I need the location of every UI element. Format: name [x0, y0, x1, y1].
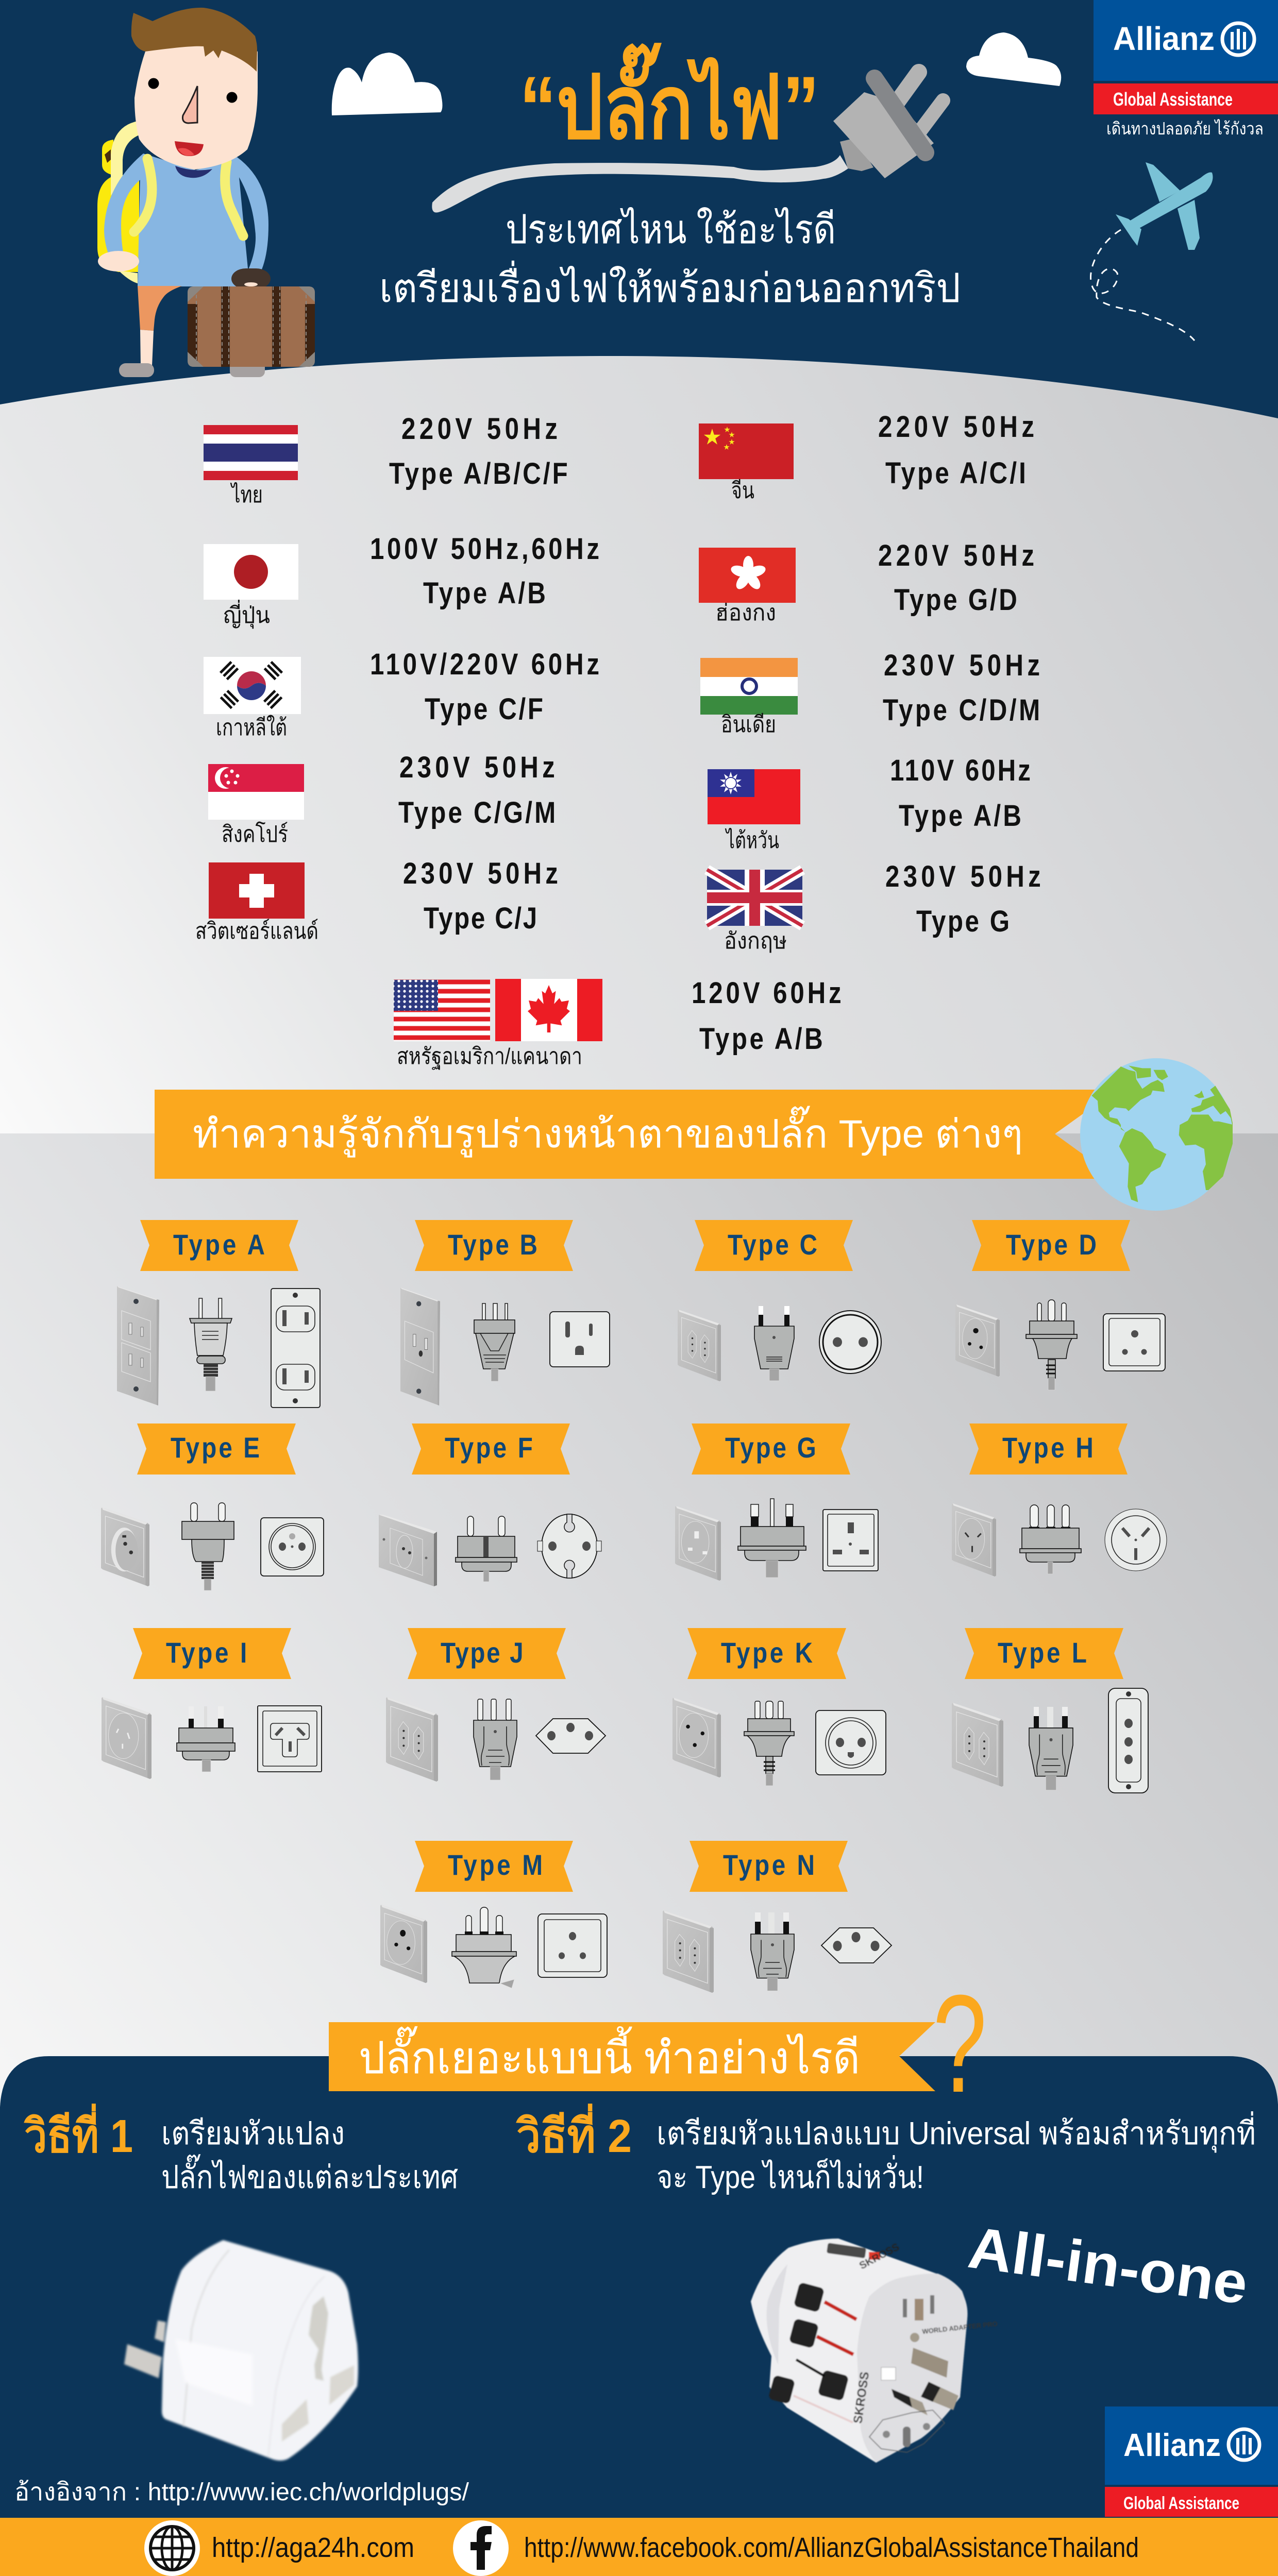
socket [536, 1719, 606, 1753]
row: South Korea: เกาหลีใต้ [216, 715, 287, 740]
icon: plug with cord [432, 72, 943, 213]
plug [1020, 1505, 1081, 1574]
illustration: traveller with backpack and suitcase [97, 8, 315, 377]
icon: facebook [453, 2520, 509, 2576]
row: Japan: Type A/B [423, 577, 546, 610]
banner Type N: Type N [723, 1849, 815, 1882]
row: USA and Canada [394, 976, 842, 1070]
wall socket [101, 1507, 149, 1586]
banner Type L: Type L [998, 1637, 1087, 1669]
header background [0, 0, 1278, 1133]
row: United Kingdom: 230V 50Hz [885, 860, 1041, 893]
flag: India [700, 658, 798, 715]
flag: China [699, 423, 794, 479]
panel: Type C [678, 1220, 881, 1381]
row: China: จีน [731, 478, 754, 503]
flag: USA [394, 980, 490, 1041]
text method 1: ปลั๊กไฟของแต่ละประเทศ [161, 2154, 458, 2195]
banner Type B [415, 1220, 573, 1271]
panel: Type L [952, 1628, 1148, 1793]
wall socket [955, 1304, 1000, 1377]
plug [744, 1701, 794, 1786]
socket [538, 1914, 607, 1977]
banner: how to handle so many plugs: ปลั๊กเยอะแบบนี้ ทำอย่างไรดี [359, 2026, 860, 2083]
row: India: 230V 50Hz [884, 649, 1040, 682]
row: Thailand [204, 412, 568, 507]
shoes [119, 361, 265, 377]
plug [190, 1298, 232, 1391]
row: Thailand: Type A/B/C/F [389, 457, 568, 490]
panel: Type J [386, 1628, 606, 1782]
wall socket [379, 1515, 437, 1586]
row: China [699, 410, 1034, 503]
method 1 [24, 2104, 458, 2195]
subtitle line 2: เตรียมเรื่องไฟให้พร้อมก่อนออกทริป [379, 261, 961, 311]
facebook link: http://www.facebook.com/AllianzGlobalAssistanceThailand [524, 2532, 1139, 2563]
collar [175, 166, 212, 178]
row: Japan [204, 532, 599, 629]
banner Type H: Type H [1002, 1432, 1094, 1464]
socket [819, 1311, 881, 1374]
suitcase [188, 268, 315, 367]
socket [537, 1514, 601, 1578]
panel: Type I [102, 1628, 322, 1779]
flag: Hong Kong [699, 548, 796, 603]
banner Type I: Type I [166, 1637, 247, 1669]
panel: plug types background [0, 1133, 1278, 2112]
row: Singapore: 230V 50Hz [399, 751, 555, 784]
row: Thailand: ไทย [230, 482, 263, 507]
backpack [97, 121, 139, 283]
row: Japan: 100V 50Hz,60Hz [370, 532, 599, 566]
panel: bottom tips [0, 2056, 1278, 2518]
wall socket [675, 1506, 721, 1581]
shorts [138, 286, 182, 331]
panel: Type D [955, 1220, 1165, 1390]
head [134, 31, 258, 170]
row: Switzerland [195, 857, 558, 944]
title: “ปลั๊กไฟ” [519, 43, 819, 157]
Allianz logo top: Global Assistance [1113, 89, 1233, 110]
banner Type D [972, 1220, 1130, 1271]
flag: Canada [495, 979, 602, 1041]
row: Hong Kong: 220V 50Hz [878, 539, 1034, 572]
icon: globe web [144, 2520, 200, 2576]
wall socket [952, 1703, 1003, 1787]
wall socket [952, 1503, 996, 1577]
icon: cloud left [332, 53, 442, 115]
row: South Korea [204, 648, 599, 740]
wall socket [380, 1905, 427, 1983]
banner Type A [140, 1220, 298, 1271]
panel: Type H [952, 1423, 1167, 1577]
panel: Type K [672, 1628, 886, 1786]
banner Type K [687, 1628, 846, 1679]
row: Singapore: Type C/G/M [398, 796, 556, 829]
socket [821, 1928, 892, 1963]
row: United Kingdom: Type G [916, 905, 1010, 938]
photo: universal all-in-one adapter: WORLD ADAPTER PRO [922, 2320, 998, 2335]
text method 2: จะ Type ไหนก็ไม่หวั่น! [657, 2155, 924, 2195]
banner Type F: Type F [445, 1432, 533, 1464]
banner Type D: Type D [1006, 1229, 1097, 1261]
banner Type B: Type B [448, 1229, 537, 1261]
wall socket [386, 1697, 438, 1782]
plug [1026, 1300, 1077, 1390]
row: Taiwan: Type A/B [899, 799, 1021, 833]
Allianz logo bottom: Global Assistance [1123, 2494, 1239, 2513]
row: United Kingdom: อังกฤษ [724, 928, 787, 954]
row: Switzerland: 230V 50Hz [403, 857, 558, 890]
footer bar [0, 2518, 1278, 2576]
row: Hong Kong: Type G/D [894, 583, 1017, 617]
section banner: plug types [155, 1090, 1117, 1179]
panel: Type N [663, 1841, 892, 1993]
row: Switzerland: สวิตเซอร์แลนด์ [195, 919, 318, 944]
subtitle [379, 207, 961, 311]
nose [182, 86, 197, 123]
panel: Type G [675, 1423, 878, 1581]
icon: cloud right [966, 32, 1061, 86]
hair [131, 8, 257, 72]
socket [1108, 1688, 1148, 1793]
row: India: อินเดีย [721, 712, 776, 737]
row: South Korea: Type C/F [425, 692, 543, 726]
wall socket [663, 1910, 714, 1993]
socket [1105, 1509, 1167, 1571]
Allianz logo top: Allianz [1113, 20, 1215, 57]
method 2 [516, 2104, 1256, 2195]
flag: South Korea [204, 657, 301, 714]
banner Type F [412, 1423, 570, 1475]
text method 2 [657, 2111, 1256, 2195]
photo: universal all-in-one adapter [751, 2239, 998, 2463]
panel: voltage by country [195, 410, 1041, 1070]
sweater [104, 154, 268, 286]
socket [816, 1710, 886, 1775]
socket [271, 1289, 320, 1408]
banner Type M [415, 1841, 573, 1892]
banner Type M: Type M [448, 1849, 543, 1882]
row: United Kingdom [707, 860, 1041, 954]
plug [754, 1306, 794, 1381]
plug [474, 1303, 515, 1381]
banner Type L [965, 1628, 1123, 1679]
plug [177, 1706, 235, 1772]
plug [182, 1503, 234, 1590]
row: Singapore [208, 751, 556, 847]
banner Type H [969, 1423, 1128, 1475]
plug [1029, 1707, 1073, 1790]
straps [134, 159, 243, 236]
wall socket [678, 1310, 721, 1381]
row: USA and Canada: สหรัฐอเมริกา/แคนาดา [397, 1044, 582, 1070]
banner Type G: Type G [725, 1432, 816, 1464]
photo: simple travel adapter [124, 2240, 358, 2461]
wall socket [400, 1288, 440, 1405]
photo: universal all-in-one adapter: SKROSS [857, 2241, 901, 2272]
row: Taiwan [708, 754, 1031, 853]
panel: Type B [400, 1220, 610, 1405]
Allianz logo bottom: Allianz [1123, 2428, 1221, 2463]
Allianz logo top [1094, 0, 1278, 138]
banner Type E: Type E [171, 1432, 260, 1464]
row: India [700, 649, 1040, 737]
plug [474, 1699, 517, 1780]
reference source: อ้างอิงจาก : http://www.iec.ch/worldplugs/ [14, 2479, 469, 2506]
row: Hong Kong [699, 539, 1034, 625]
flag: Switzerland [209, 862, 305, 919]
subtitle line 1: ประเทศไหน ใช้อะไรดี [506, 207, 836, 252]
text method 1 [161, 2116, 458, 2195]
wall socket [117, 1286, 159, 1405]
plug [452, 1907, 516, 1988]
callout: All-in-one: All-in-one [965, 2215, 1252, 2317]
hand [98, 251, 139, 272]
row: Japan: ญี่ปุ่น [223, 599, 270, 629]
leg [140, 330, 154, 366]
socket [1103, 1314, 1165, 1371]
flag: Singapore [208, 764, 304, 820]
banner Type I [133, 1628, 291, 1679]
row: USA and Canada: 120V 60Hz [692, 976, 842, 1010]
panel: Type E [101, 1423, 324, 1590]
flag: Taiwan [708, 768, 800, 824]
banner Type G [692, 1423, 850, 1475]
flag: United Kingdom [707, 870, 802, 926]
panel: Type M [380, 1841, 607, 1988]
row: India: Type C/D/M [883, 693, 1040, 727]
banner: how to handle so many plugs [329, 2022, 935, 2091]
icon: airplane [1116, 162, 1213, 250]
banner Type N [690, 1841, 848, 1892]
row: Hong Kong: ฮ่องกง [715, 600, 776, 625]
banner Type J [408, 1628, 566, 1679]
panel: country list background [0, 356, 1278, 1134]
icon: globe [1080, 1058, 1233, 1211]
row: Singapore: สิงคโปร์ [222, 821, 288, 847]
row: Thailand: 220V 50Hz [401, 412, 558, 446]
wall socket [102, 1697, 152, 1779]
socket [258, 1706, 322, 1772]
icon: question mark: ? [933, 1967, 987, 2122]
banner Type C [695, 1220, 853, 1271]
website link: http://aga24h.com [212, 2532, 414, 2563]
flag: Thailand [204, 425, 298, 480]
wall socket [672, 1698, 721, 1777]
panel: Type A [117, 1220, 320, 1408]
heading method 1: วิธีที่ 1 [24, 2104, 133, 2162]
eyes [148, 78, 237, 103]
row: USA and Canada: Type A/B [699, 1022, 823, 1056]
banner Type K: Type K [721, 1637, 813, 1669]
banner Type C: Type C [728, 1229, 817, 1261]
row: Taiwan: 110V 60Hz [890, 754, 1031, 787]
panel: Type F [379, 1423, 601, 1586]
banner Type A: Type A [173, 1229, 265, 1261]
plug [751, 1912, 794, 1991]
photo: universal all-in-one adapter: SKROSS [851, 2371, 872, 2425]
row: China: 220V 50Hz [878, 410, 1034, 444]
row: China: Type A/C/I [885, 456, 1026, 490]
icon: dashed flight path [1091, 230, 1195, 341]
mouth [175, 141, 204, 156]
flag: Japan [204, 544, 298, 600]
banner Type J: Type J [441, 1637, 524, 1669]
row: Taiwan: ไต้หวัน [725, 827, 779, 853]
socket [823, 1510, 878, 1571]
socket [261, 1518, 324, 1576]
plug [456, 1516, 517, 1582]
plug [738, 1499, 806, 1578]
heading method 2: วิธีที่ 2 [516, 2104, 632, 2162]
row: Switzerland: Type C/J [424, 902, 537, 935]
row: South Korea: 110V/220V 60Hz [370, 648, 599, 681]
socket [550, 1312, 610, 1367]
banner Type E [137, 1423, 296, 1475]
Allianz logo bottom [1105, 2406, 1278, 2517]
section banner: plug types: ทำความรู้จักกับรูปร่างหน้าตาของปลั๊ก Type ต่างๆ [193, 1106, 1023, 1158]
text method 1: เตรียมหัวแปลง [161, 2116, 345, 2151]
